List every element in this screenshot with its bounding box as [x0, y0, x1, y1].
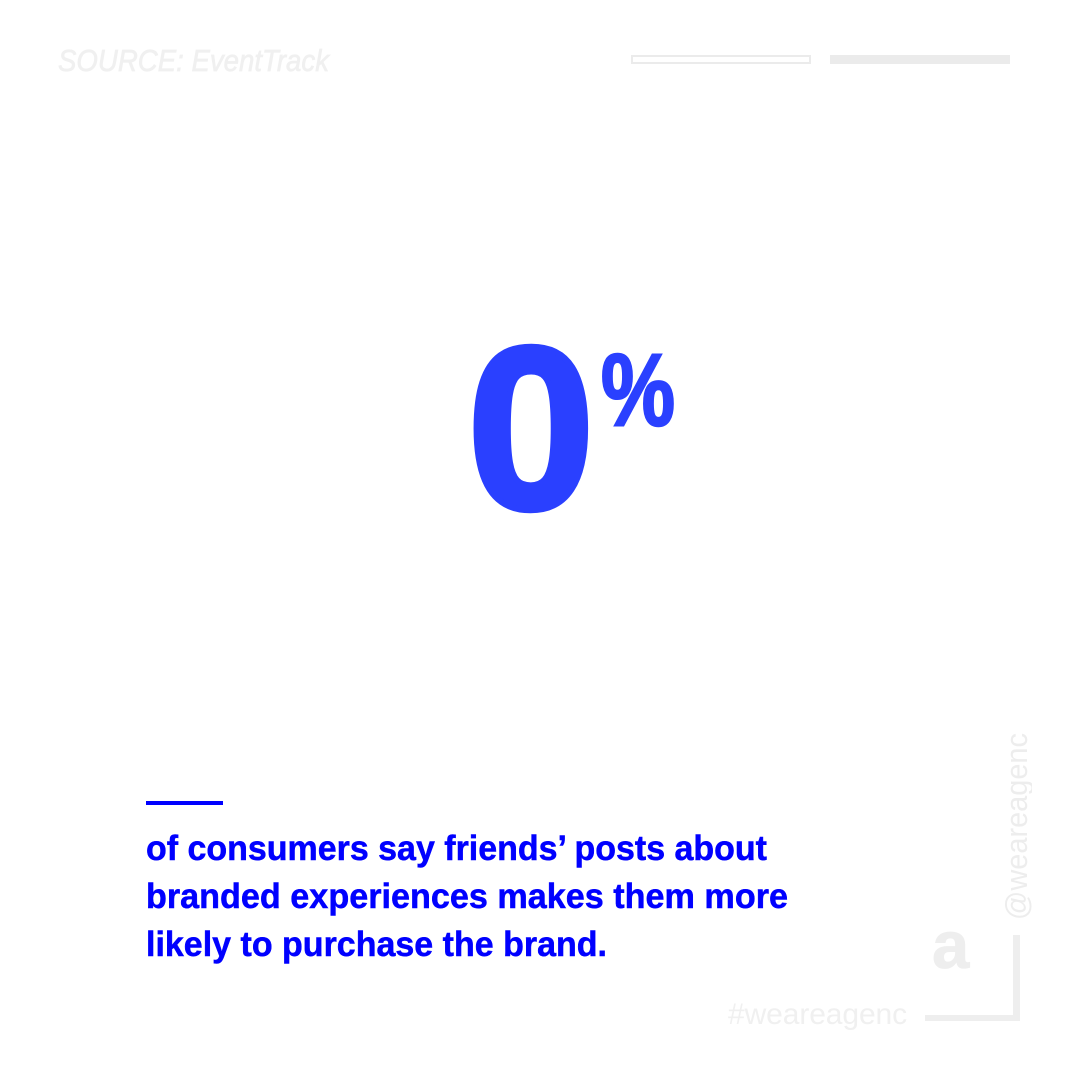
description text: likely to purchase the brand.	[146, 925, 607, 964]
hashtag: #weareagenc	[728, 998, 907, 1031]
progress indicator: filled bar	[830, 55, 1010, 64]
logo letter: a	[932, 908, 969, 983]
bracket horizontal	[925, 1015, 1020, 1021]
corner bracket	[925, 935, 1020, 1021]
description text: of consumers say friends’ posts about	[146, 829, 767, 868]
accent rule	[146, 801, 223, 805]
progress indicator: outlined bar	[631, 55, 811, 64]
description text: branded experiences makes them more	[146, 877, 788, 916]
description text	[146, 829, 788, 964]
bracket vertical	[1013, 935, 1020, 1021]
big number with percent sign	[468, 330, 675, 525]
